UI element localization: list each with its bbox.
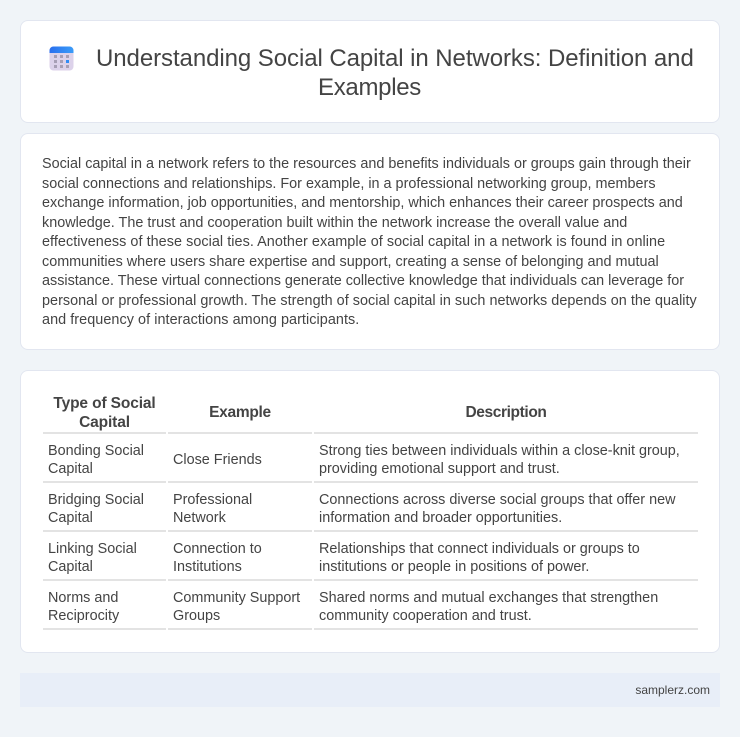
text block: paragraph: communities where users share expertise and support, creating a sense of belonging and mutual	[42, 254, 659, 270]
title: Understanding Social Capital in Networks: Definition and	[96, 45, 694, 72]
table row: bridging: information and broader opportunities.	[319, 510, 562, 526]
table row: linking: institutions or people in positions of power.	[319, 559, 589, 575]
table row: norms: Norms and	[48, 590, 118, 606]
footer bar	[20, 673, 720, 707]
table row: linking: Capital	[48, 559, 93, 575]
text block: paragraph: personal or professional growth. The strength of social capital in such networks depends on the quality	[42, 292, 697, 308]
table row: norms: Community Support	[173, 590, 300, 606]
table row: linking	[48, 541, 640, 575]
table row: bonding: Close Friends	[173, 452, 262, 468]
table row: norms: Shared norms and mutual exchanges that strengthen	[319, 590, 658, 606]
table row: linking: Connection to	[173, 541, 262, 557]
table row: bridging: Professional	[173, 492, 252, 508]
table row: linking: Relationships that connect individuals or groups to	[319, 541, 640, 557]
table row: linking: Institutions	[173, 559, 242, 575]
table row: bridging: Bridging Social	[48, 492, 144, 508]
table row: bridging: Network	[173, 510, 226, 526]
table: social capital types	[43, 395, 698, 630]
text block: paragraph: social connections and relationships. For example, in a professional networking group, members	[42, 176, 656, 192]
panel: intro paragraph	[20, 133, 720, 350]
table row: bonding: Bonding Social	[48, 443, 144, 459]
table header row: Capital	[79, 414, 130, 431]
table row: bonding: Strong ties between individuals within a close-knit group,	[319, 443, 680, 459]
table row: norms: community cooperation and trust.	[319, 608, 532, 624]
table row: linking: Linking Social	[48, 541, 137, 557]
text block: paragraph: effectiveness of these social ties. Another example of social capital in a network is found in online	[42, 234, 665, 250]
table row: bridging	[48, 492, 676, 526]
panel: table card	[20, 370, 720, 653]
icon: calendar	[50, 46, 74, 70]
title	[96, 45, 694, 101]
text block: paragraph: assistance. These virtual connections generate collective knowledge that individuals can leverage for	[42, 273, 684, 289]
table row: norms	[48, 590, 658, 624]
table row: bridging: Connections across diverse social groups that offer new	[319, 492, 676, 508]
table row: bridging: Capital	[48, 510, 93, 526]
text block: paragraph	[42, 156, 697, 328]
table row: norms: Reciprocity	[48, 608, 119, 624]
table row: bonding: providing emotional support and trust.	[319, 461, 560, 477]
table row: bonding	[48, 443, 680, 477]
text block: paragraph: Social capital in a network refers to the resources and benefits individuals or groups gain through their	[42, 156, 691, 172]
text block: paragraph: exchange information, job opportunities, and mentorship, which enhances their career prospects and	[42, 195, 683, 211]
table header row: Description	[466, 404, 546, 421]
text block: paragraph: and frequency of interactions among participants.	[42, 312, 359, 328]
title: Examples	[318, 74, 421, 101]
table header row	[53, 395, 546, 431]
panel: title header	[20, 20, 720, 123]
table row: norms: Groups	[173, 608, 220, 624]
text block: paragraph: knowledge. The trust and cooperation built within the network increase the overall value and	[42, 214, 627, 230]
footer text: samplerz.com	[635, 683, 710, 697]
table row: bonding: Capital	[48, 461, 93, 477]
table header row: Example	[209, 404, 271, 421]
table header row: Type of Social	[53, 395, 156, 412]
